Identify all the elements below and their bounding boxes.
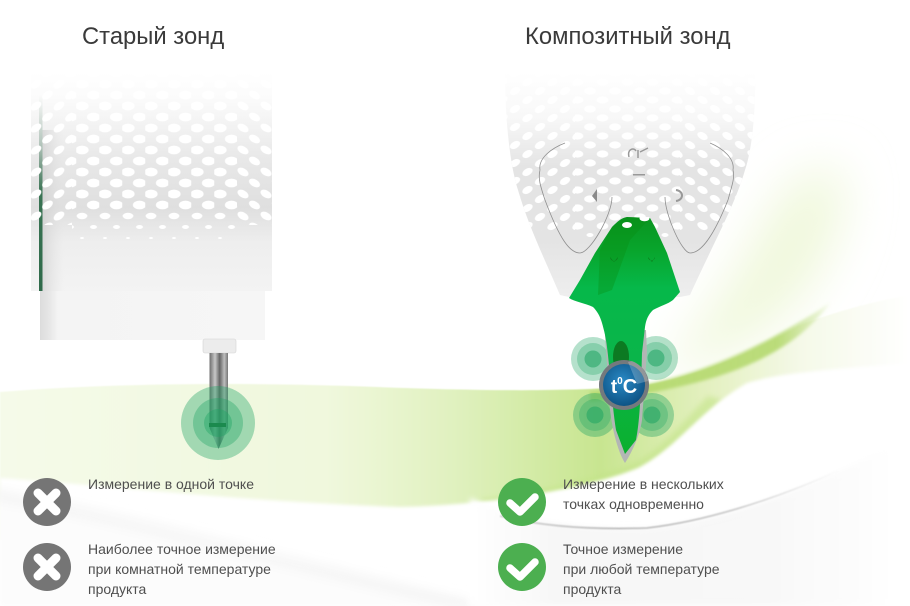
text: old probe point 2: Наиболее точное измерение: [88, 541, 276, 557]
gray tip edge: [605, 330, 647, 463]
probe base: [40, 291, 265, 340]
text: composite probe point 2: продукта: [563, 581, 621, 597]
temperature badge: C: [623, 376, 637, 398]
needle: [210, 353, 228, 449]
text: composite probe point 2: [563, 541, 720, 597]
probe head with dots: [507, 120, 754, 297]
text: old probe point 1: Измерение в одной точке: [88, 476, 254, 492]
text: composite probe point 1: [563, 476, 724, 512]
background swoosh: [0, 167, 910, 606]
white dots over body: [622, 217, 650, 228]
text: composite probe point 1: точках одновременно: [563, 496, 704, 512]
icon: check 2: [498, 543, 546, 591]
text: composite probe point 1: Измерение в нескольких: [563, 476, 724, 492]
heading: old probe: Старый зонд: [82, 23, 224, 50]
icon: cross 2: [23, 543, 71, 591]
text: old probe point 2: при комнатной температуре: [88, 561, 271, 577]
probe collar: [203, 339, 236, 353]
composite probe illustration: [507, 120, 754, 463]
inner slot: [613, 341, 629, 373]
heading: composite probe: Композитный зонд: [525, 23, 730, 50]
dark shading on body: [598, 217, 650, 295]
measurement point: [181, 386, 255, 460]
temperature badge: [599, 360, 649, 410]
probe handle with dots: [31, 72, 272, 291]
green probe body: [569, 217, 680, 454]
body screw holes: [610, 257, 655, 262]
text: composite probe point 2: Точное измерение: [563, 541, 683, 557]
icon: cross 1: [23, 478, 71, 526]
text: old probe point 2: продукта: [88, 581, 146, 597]
text: composite probe point 2: при любой температуре: [563, 561, 720, 577]
temperature badge: 0: [617, 376, 623, 387]
icon: check 1: [498, 478, 546, 526]
measurement points: [571, 336, 678, 437]
text: old probe point 2: [88, 541, 276, 597]
old probe illustration: [31, 72, 272, 460]
temperature badge: t: [611, 377, 617, 398]
